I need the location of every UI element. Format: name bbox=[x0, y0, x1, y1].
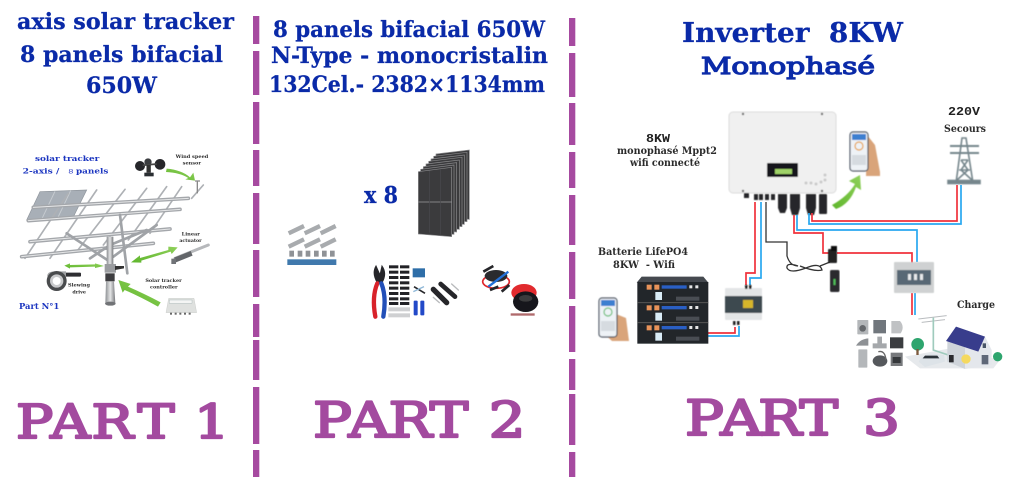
text: battery label: Batterie LifePO4 bbox=[598, 246, 688, 258]
icon: slewing drive bbox=[47, 271, 81, 291]
text: tracker title bbox=[23, 154, 108, 176]
panel: part 1 bbox=[16, 9, 234, 450]
heading: part 1 title: 8 panels bifacial bbox=[20, 42, 223, 68]
divider: right dashed line bbox=[569, 18, 575, 477]
icon: tracker frame bbox=[22, 185, 203, 273]
text: grid voltage: 220V bbox=[948, 105, 981, 119]
text: quantity x8: x 8 bbox=[364, 182, 398, 209]
icon: battery breaker box bbox=[725, 285, 762, 325]
icon: wind speed sensor bbox=[135, 158, 200, 193]
heading: PART 1: PART 1 bbox=[16, 395, 229, 450]
text: battery label bbox=[598, 246, 688, 271]
text: battery label: 8KW - Wifi bbox=[613, 259, 675, 271]
heading: part 1 title: axis solar tracker bbox=[17, 9, 234, 35]
text: tracker title: solar tracker bbox=[35, 154, 100, 163]
icon: cable reel bbox=[483, 266, 509, 292]
text: inverter description: 8KW bbox=[646, 132, 671, 146]
icon: solar tracker controller bbox=[166, 298, 197, 315]
heading: part 3 title bbox=[682, 18, 904, 80]
panel: part 3 bbox=[598, 18, 1002, 369]
text: slewing drive label bbox=[68, 283, 91, 295]
icon: cable rolls bbox=[511, 284, 538, 316]
text: controller label bbox=[145, 278, 182, 291]
text: wind speed sensor label: Wind speed bbox=[175, 154, 209, 160]
text: wind speed sensor label bbox=[175, 154, 209, 167]
icon: mounting brackets bbox=[287, 226, 336, 265]
icon: tracker post bbox=[105, 237, 124, 306]
arrow: slewing drive bbox=[64, 263, 104, 269]
icon: connector set bbox=[388, 265, 425, 317]
heading: part 2 title: 8 panels bifacial 650W bbox=[273, 17, 545, 43]
text: linear actuator label: actuator bbox=[179, 238, 202, 244]
icon: current clamp bbox=[828, 246, 837, 263]
icon: linear actuator bbox=[171, 245, 208, 264]
heading: part 2 title: N-Type - monocristalin bbox=[271, 43, 548, 69]
text: grid voltage: Secours bbox=[944, 124, 986, 135]
icon: pylon bbox=[948, 138, 980, 184]
text: grid voltage bbox=[944, 105, 986, 135]
arrow: wind sensor to tracker bbox=[166, 169, 195, 181]
text: part number: Part N°1 bbox=[19, 301, 59, 311]
icon: phone with app, battery bbox=[599, 298, 629, 341]
icon: battery stack bbox=[637, 277, 708, 344]
icon: MC4 connectors bbox=[433, 284, 458, 303]
chart: two-axis solar tracker diagram bbox=[19, 154, 209, 315]
text: inverter description: monophasé Mppt2 bbox=[617, 146, 717, 157]
heading: part 1 title: 650W bbox=[86, 73, 157, 99]
text: load label: Charge bbox=[957, 299, 995, 311]
heading: part 3 title: Inverter 8KW bbox=[682, 18, 904, 49]
text: linear actuator label: Linear bbox=[182, 231, 200, 237]
heading: part 1 title bbox=[17, 9, 234, 99]
arrow: inverter to phone bbox=[832, 175, 861, 209]
icon: household appliances bbox=[856, 320, 903, 368]
text: inverter description: wifi connecté bbox=[629, 158, 700, 169]
heading: PART 2: PART 2 bbox=[313, 391, 526, 449]
text: tracker title: 2-axis / bbox=[23, 166, 60, 175]
text: slewing drive label: drive bbox=[72, 289, 86, 295]
text: linear actuator label bbox=[179, 231, 202, 244]
heading: part 2 title: 132Cel.- 2382×1134mm bbox=[269, 72, 545, 98]
icon: inverter bbox=[729, 112, 836, 215]
arrow: solar tracker controller bbox=[118, 280, 161, 307]
text: controller label: controller bbox=[150, 285, 178, 291]
icon: house with antenna and car bbox=[905, 316, 1002, 369]
icon: phone with app, inverter bbox=[850, 132, 880, 176]
chart: wiring lines bbox=[708, 185, 961, 336]
text: slewing drive label: Slewing bbox=[68, 283, 91, 289]
heading: PART 3: PART 3 bbox=[685, 389, 900, 447]
heading: part 3 title: Monophasé bbox=[701, 54, 875, 80]
heading: part 2 title bbox=[269, 17, 548, 98]
icon: stack of 8 solar panels bbox=[418, 150, 469, 237]
icon: crimping tool bbox=[374, 266, 385, 317]
panel: part 2 bbox=[269, 17, 548, 449]
text: tracker title: panels bbox=[76, 166, 108, 175]
text: tracker title: 8 bbox=[68, 169, 74, 176]
text: inverter description bbox=[617, 132, 717, 169]
text: controller label: Solar tracker bbox=[145, 278, 182, 284]
divider: left dashed line bbox=[253, 16, 259, 477]
icon: smart meter bbox=[830, 270, 840, 292]
text: wind speed sensor label: sensor bbox=[183, 161, 201, 167]
icon: solar panels on frame bbox=[27, 190, 87, 220]
icon: distribution box bbox=[894, 262, 934, 293]
arrow: linear actuator bbox=[131, 247, 178, 263]
